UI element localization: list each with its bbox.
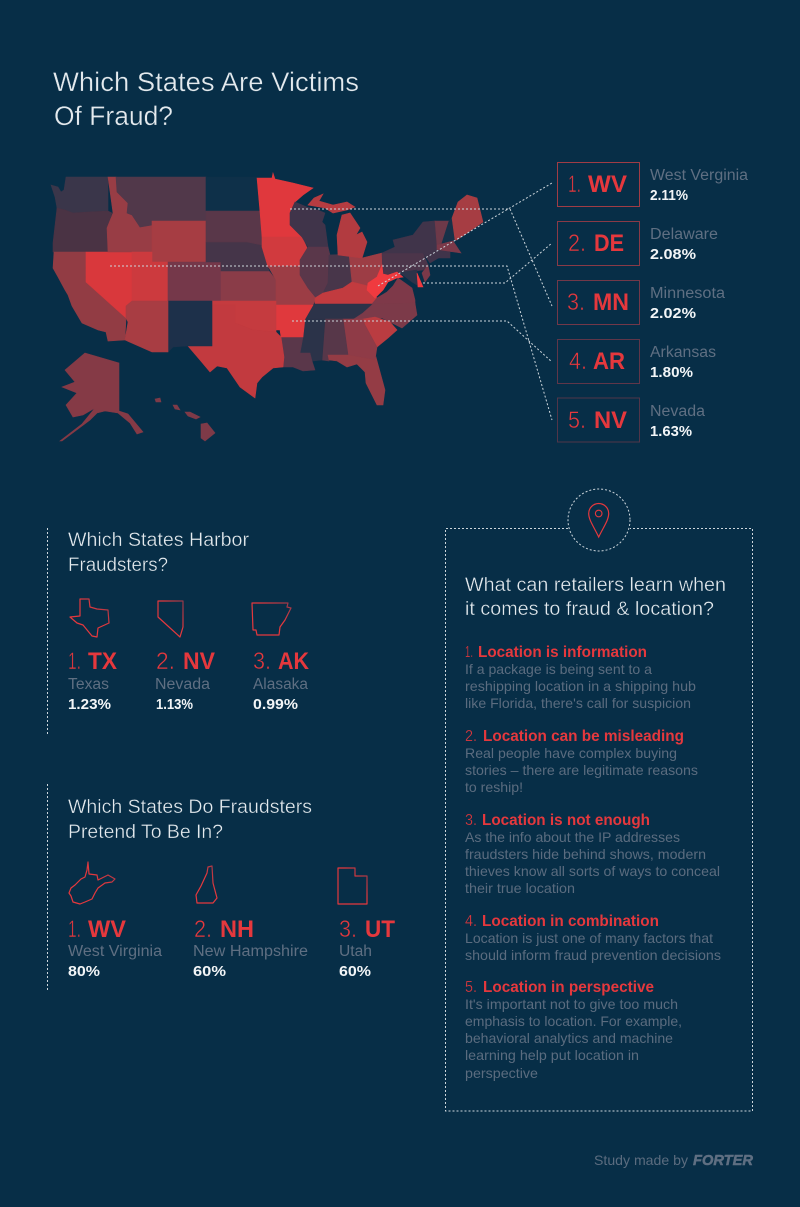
- heading: what can retailers learn: it comes to fraud & location?: [465, 599, 714, 620]
- stat: Utah: 3.: [339, 916, 357, 943]
- stat: New Hampshire: NH: [220, 916, 254, 943]
- heading: what can retailers learn: What can retailers learn when: [465, 575, 726, 596]
- panel: states harboring fraudsters: [48, 528, 310, 735]
- lesson 4: [465, 913, 721, 963]
- heading: harbor fraudsters: Which States Harbor: [68, 530, 250, 551]
- lesson 4: should inform fraud prevention decisions: [465, 947, 721, 963]
- stat: Alasaka: Alasaka: [253, 676, 308, 693]
- lesson 1: If a package is being sent to a: [465, 661, 652, 677]
- heading: harbor fraudsters: Fraudsters?: [68, 555, 168, 576]
- heading: pretend to be in: Which States Do Fraudsters: [68, 797, 312, 818]
- panel: what retailers can learn: [446, 489, 752, 1111]
- stat: Alasaka: 3.: [253, 648, 271, 675]
- title: Which States Are Victims: [53, 67, 359, 97]
- rank 4: Arkansas: AR: [593, 348, 625, 375]
- rank 3: Minnesota: MN: [593, 289, 629, 316]
- heading: pretend to be in: Pretend To Be In?: [68, 822, 223, 843]
- lesson 5: perspective: [465, 1065, 538, 1081]
- title: [53, 67, 359, 131]
- rank 2: Delaware: 2.08%: [650, 246, 696, 263]
- stat: West Virginia: 1.: [68, 916, 81, 943]
- stat: Alasaka: AK: [278, 648, 310, 675]
- lesson 4: Location in combination: [482, 913, 659, 930]
- rank 4: Arkansas: 1.80%: [650, 364, 693, 381]
- lesson 1: [465, 644, 696, 711]
- stat: Texas: Texas: [68, 676, 109, 693]
- rank 1: West Virginia: 2.11%: [650, 187, 688, 204]
- lesson 2: to reship!: [465, 779, 523, 795]
- rank 5: Nevada: 1.63%: [650, 423, 692, 440]
- lesson 4: 4.: [465, 913, 477, 930]
- stat: Nevada: [155, 648, 215, 713]
- stat: New Hampshire: New Hampshire: [193, 943, 308, 960]
- lesson 5: emphasis to location. For example,: [465, 1013, 682, 1029]
- rank 3: Minnesota: Minnesota: [650, 285, 725, 302]
- rank 2: Delaware: 2.: [568, 230, 586, 257]
- rank 2: Delaware: DE: [594, 230, 624, 257]
- lesson 3: their true location: [465, 880, 575, 896]
- icon: Nevada outline: [158, 601, 183, 637]
- rank 2: Delaware: Delaware: [650, 226, 718, 243]
- lesson 5: Location in perspective: [483, 979, 654, 996]
- panel: states fraudsters pretend to be in: [48, 784, 395, 991]
- stat: Alasaka: [253, 648, 310, 713]
- lesson 1: 1.: [465, 644, 473, 661]
- heading: pretend to be in: [68, 797, 312, 843]
- rank 1: West Virginia: WV: [588, 171, 627, 198]
- lesson 2: 2.: [465, 728, 477, 745]
- rank 3: Minnesota: 2.02%: [650, 305, 696, 322]
- footer credit: [594, 1152, 753, 1169]
- icon: West Virginia outline: [69, 862, 115, 904]
- stat: Texas: 1.23%: [68, 696, 111, 713]
- lesson 3: 3.: [465, 812, 477, 829]
- stat: West Virginia: [68, 916, 162, 980]
- title: Of Fraud?: [54, 101, 173, 131]
- rank 5: Nevada: NV: [594, 407, 627, 434]
- rank 4: Arkansas: 4.: [569, 348, 587, 375]
- lesson 5: 5.: [465, 979, 477, 996]
- lesson 3: As the info about the IP addresses: [465, 829, 680, 845]
- rank 1: West Virginia: West Verginia: [650, 167, 748, 184]
- rank 5: Nevada: 5.: [568, 407, 586, 434]
- lesson 3: [465, 812, 720, 896]
- icon: Texas outline: [70, 599, 109, 637]
- lesson 1: like Florida, there's call for suspicion: [465, 695, 691, 711]
- lesson 5: It's important not to give too much: [465, 996, 678, 1012]
- lesson 3: Location is not enough: [482, 812, 650, 829]
- lesson 2: Real people have complex buying: [465, 745, 677, 761]
- stat: Nevada: 2.: [156, 648, 175, 675]
- stat: New Hampshire: 60%: [193, 963, 226, 980]
- rank 3: Minnesota: [558, 280, 725, 324]
- stat: Texas: [68, 648, 117, 713]
- stat: Utah: UT: [365, 916, 395, 943]
- icon: location pin in dotted circle: [568, 489, 630, 551]
- stat: Utah: 60%: [339, 963, 371, 980]
- lesson 4: Location is just one of many factors that: [465, 930, 713, 946]
- ranking: victim states: [558, 162, 748, 442]
- footer credit: FORTER: [693, 1152, 753, 1169]
- rank 5: Nevada: Nevada: [650, 403, 705, 420]
- icon: Arkansas outline: [252, 603, 291, 635]
- lesson 2: stories – there are legitimate reasons: [465, 762, 698, 778]
- lesson 5: behavioral analytics and machine: [465, 1030, 673, 1046]
- stat: Nevada: 1.13%: [156, 696, 193, 713]
- stat: West Virginia: WV: [88, 916, 126, 943]
- rank 4: Arkansas: Arkansas: [650, 344, 716, 361]
- heading: what can retailers learn: [465, 575, 726, 620]
- lesson 2: [465, 728, 698, 795]
- stat: New Hampshire: [193, 916, 308, 980]
- stat: West Virginia: West Virginia: [68, 943, 162, 960]
- map: fraud victims by state: [51, 173, 483, 441]
- icon: New Hampshire outline: [196, 866, 217, 903]
- footer credit: Study made by: [594, 1152, 688, 1168]
- stat: West Virginia: 80%: [68, 963, 100, 980]
- icon: Utah outline: [338, 868, 367, 904]
- stat: Texas: TX: [88, 648, 117, 675]
- connector lines: [110, 183, 552, 420]
- stat: Nevada: Nevada: [155, 676, 210, 693]
- lesson 1: Location is information: [478, 644, 647, 661]
- lesson 5: learning help put location in: [465, 1047, 639, 1063]
- lesson 2: Location can be misleading: [483, 728, 684, 745]
- lesson 5: [465, 979, 682, 1081]
- stat: Alasaka: 0.99%: [253, 696, 298, 713]
- lesson 3: fraudsters hide behind shows, modern: [465, 846, 706, 862]
- rank 1: West Virginia: 1.: [568, 171, 581, 198]
- rank 5: Nevada: [558, 398, 705, 442]
- stat: Texas: 1.: [68, 648, 81, 675]
- stat: Utah: Utah: [339, 943, 372, 960]
- rank 2: Delaware: [558, 222, 718, 266]
- stat: Nevada: NV: [183, 648, 215, 675]
- stat: Utah: [339, 916, 395, 980]
- lesson 3: thieves know all sorts of ways to conceal: [465, 863, 720, 879]
- rank 1: West Virginia: [558, 162, 748, 206]
- lesson 1: reshipping location in a shipping hub: [465, 678, 696, 694]
- stat: New Hampshire: 2.: [194, 916, 212, 943]
- rank 4: Arkansas: [558, 340, 716, 384]
- rank 3: Minnesota: 3.: [567, 289, 585, 316]
- heading: harbor fraudsters: [68, 530, 250, 576]
